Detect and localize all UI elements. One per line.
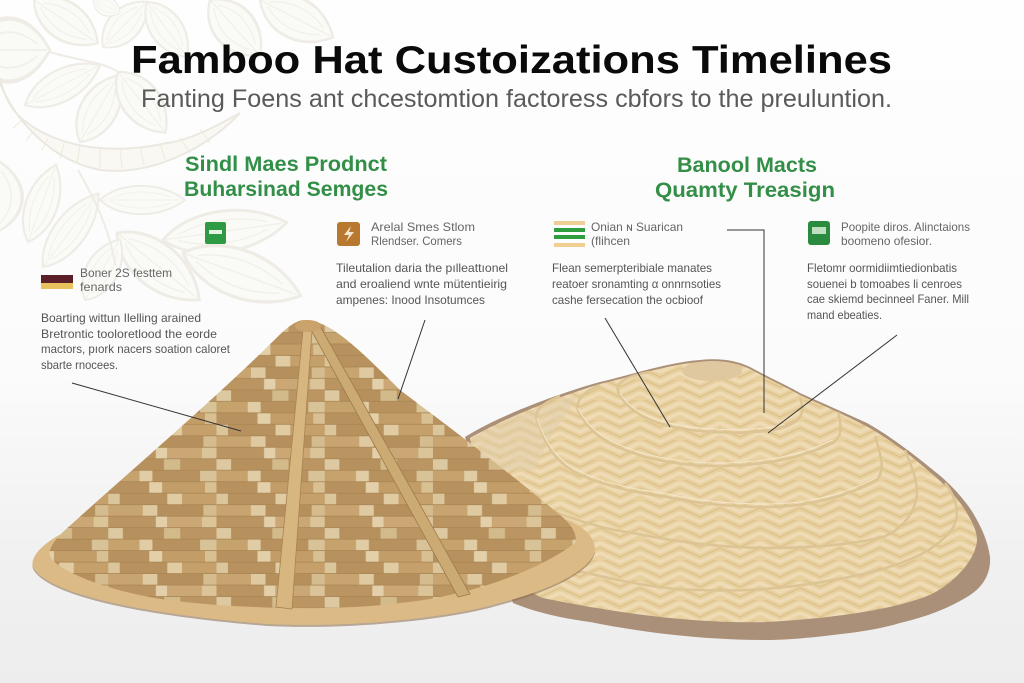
label: Onian ɴ Suarican (591, 220, 683, 234)
right hat (465, 359, 990, 640)
callout: centre right (552, 220, 721, 307)
subtitle: Fanting Foens ant chcestomtion factoress cbfors to the preuluntion. (141, 85, 892, 113)
description: mactors, pıork nacers soation caloret (41, 342, 231, 356)
concentric rings (495, 372, 957, 591)
heading: right column: Banool Macts (677, 154, 817, 177)
label (591, 220, 683, 248)
rib: centre (276, 330, 312, 609)
description: ampenes: Inood Insotumces (336, 293, 485, 307)
description: mand ebeaties. (807, 308, 882, 322)
label: boomeno ofesior. (841, 234, 932, 248)
callout: centre left (336, 220, 508, 307)
title: Famboo Hat Custoizations Timelines (131, 39, 892, 82)
heading: left column (184, 153, 388, 201)
callout: far right (807, 220, 970, 322)
brim shadow (32, 502, 595, 627)
background leaf pattern (0, 0, 342, 318)
icon: stripes (554, 221, 585, 247)
description: sbarte rnocees. (41, 358, 118, 372)
description: cae skiemd becinneel Faner. Mill (807, 292, 969, 306)
heading: right column (655, 154, 835, 202)
icon: green badge (205, 222, 226, 244)
heading: right column: Quamty Treasign (655, 179, 835, 202)
description (41, 311, 231, 372)
label: (flihcen (591, 234, 630, 248)
heading: left column: Buharsinad Semges (184, 178, 388, 201)
heading: left column: Sindl Maes Prodnct (185, 153, 387, 176)
description (336, 261, 508, 307)
label: Boner 2S festtem (80, 266, 172, 280)
description: and eroaliend wnte mütentieirig (336, 277, 507, 291)
leader lines (72, 230, 897, 433)
description: Boarting wittun Ilelling arained (41, 311, 201, 325)
description (807, 261, 969, 322)
description: cashe fersecation the ocbioof (552, 293, 704, 307)
woven surface (470, 361, 977, 622)
callout: far left (41, 266, 231, 372)
label: Rlendser. Comers (371, 234, 462, 248)
label (371, 220, 475, 248)
crown knot (295, 320, 321, 332)
left hat (32, 320, 595, 627)
icon: brown badge (337, 222, 360, 246)
label: Arelal Smes Stlom (371, 220, 475, 234)
label: fenards (80, 280, 122, 294)
icon: green square (808, 221, 830, 245)
label (80, 266, 172, 294)
icon: flag (41, 275, 73, 289)
brim (32, 500, 595, 625)
description: Fletomr oormidiimtiedionbatis (807, 261, 957, 275)
label: Poopite diros. Alinctaions (841, 220, 970, 234)
description: Bretrontic tooloretlood the eorde (41, 327, 217, 341)
description: reatoer sronamting α onnrnsoties (552, 277, 721, 291)
rib: right (310, 326, 470, 597)
woven cone (50, 320, 576, 608)
label (841, 220, 970, 248)
crown (682, 361, 742, 381)
description: Tileutalion daria the pılleattıonel (336, 261, 508, 275)
brim edge (465, 359, 990, 640)
description (552, 261, 721, 307)
description: Flean semerpteribiale manates (552, 261, 712, 275)
description: souenei b tomoabes li cenroes (807, 277, 962, 291)
